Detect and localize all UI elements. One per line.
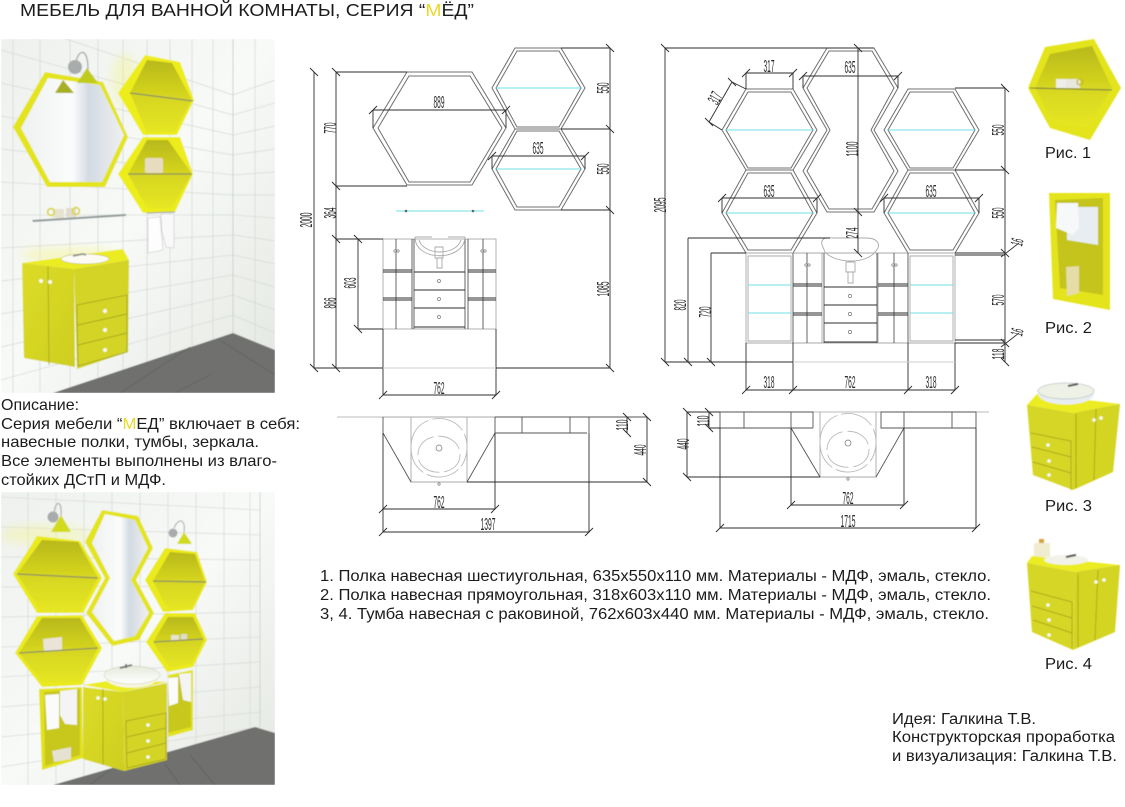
dimension labels: 1085 bbox=[593, 282, 613, 296]
caption: figure 4: Рис. 4 bbox=[1045, 656, 1092, 673]
figure 4: vanity with counter basin bbox=[1027, 539, 1120, 650]
lower cabinets bbox=[746, 238, 955, 362]
dimension labels: 118 bbox=[988, 348, 1008, 360]
dimension labels: 550 bbox=[593, 163, 613, 174]
dimension labels: 635 bbox=[844, 57, 856, 77]
dimension labels: 16 bbox=[1006, 326, 1028, 338]
drawing: plan view, right: 1715 bbox=[840, 511, 856, 531]
dimension labels: 762 bbox=[844, 372, 856, 392]
drawing: plan view, right: 440 bbox=[673, 438, 693, 450]
dimension labels: 635 bbox=[764, 181, 774, 201]
dimension labels: 866 bbox=[320, 298, 340, 308]
credits: Конструкторская проработка bbox=[892, 729, 1115, 746]
dimension labels: 720 bbox=[695, 306, 715, 318]
drawing: plan view, left: 110 bbox=[612, 419, 632, 430]
drawing: plan view, left: 762 bbox=[434, 492, 444, 512]
dimension labels bbox=[296, 82, 613, 398]
dimension labels: 364 bbox=[320, 207, 340, 218]
description text: Все элементы выполнены из влаго- bbox=[1, 453, 277, 470]
dimension labels: 635 bbox=[532, 138, 544, 158]
dimension labels: 820 bbox=[670, 299, 690, 310]
dimension labels: 1100 bbox=[842, 141, 862, 156]
parts list: 1. Полка навесная шестиугольная, 635х550х110 мм. Материалы - МДФ, эмаль, стекло. bbox=[320, 568, 991, 585]
figure 1: hexagon shelf bbox=[1028, 39, 1121, 140]
dimension labels: 317 bbox=[764, 56, 774, 76]
description text: навесные полки, тумбы, зеркала. bbox=[1, 434, 259, 451]
left shelf hexagons bbox=[722, 89, 817, 253]
dimension labels: 762 bbox=[434, 378, 444, 398]
dimension labels bbox=[650, 56, 1028, 392]
vanity cabinet front bbox=[383, 237, 496, 329]
parts list: 2. Полка навесная прямоугольная, 318х603х110 мм. Материалы - МДФ, эмаль, стекло. bbox=[320, 587, 991, 604]
dimension labels: 635 bbox=[926, 181, 936, 201]
drawing: plan view, right: 762 bbox=[842, 488, 854, 508]
drawing: plan view, left: 1397 bbox=[480, 514, 496, 534]
dimension labels: 2000 bbox=[296, 212, 316, 228]
lower shelf hexagon bbox=[492, 129, 585, 210]
drawing: front elevation, full set bbox=[650, 44, 1028, 394]
caption: figure 2: Рис. 2 bbox=[1045, 320, 1092, 337]
dimension labels: 550 bbox=[988, 207, 1008, 218]
description text: Серия мебели “ МЕД” включает в себя: bbox=[1, 416, 300, 433]
figure 3: vanity with vessel basin bbox=[1027, 383, 1120, 490]
parts list: 3, 4. Тумба навесная с раковиной, 762х603х440 мм. Материалы - МДФ, эмаль, стекло. bbox=[320, 606, 989, 623]
dimension labels: 889 bbox=[434, 92, 444, 112]
drawing: front elevation, mirror set: 550 bbox=[593, 82, 613, 94]
credits: и визуализация: Галкина Т.В. bbox=[892, 748, 1117, 765]
title: МЕБЕЛЬ ДЛЯ ВАННОЙ КОМНАТЫ, СЕРИЯ “ МЁД” bbox=[20, 0, 474, 20]
dimension labels: 317 bbox=[704, 88, 726, 108]
dimension labels: 318 bbox=[764, 372, 774, 392]
dimension labels: 603 bbox=[340, 278, 360, 288]
description text: Описание: bbox=[1, 397, 79, 414]
center tall mirror bbox=[803, 48, 898, 212]
upper shelf hexagon bbox=[492, 48, 585, 129]
dimension labels: 770 bbox=[320, 122, 340, 134]
dimension labels: 16 bbox=[1006, 236, 1028, 248]
parts list bbox=[320, 568, 991, 623]
drawing: plan view, right: 110 bbox=[693, 415, 713, 426]
credits bbox=[892, 711, 1117, 765]
description text: стойких ДСтП и МДФ. bbox=[1, 472, 166, 489]
glass shelf bbox=[396, 210, 484, 212]
right shelf hexagons bbox=[884, 89, 979, 253]
drawing: plan view, left: 440 bbox=[630, 444, 650, 456]
dimension labels: 318 bbox=[926, 372, 936, 392]
dimension labels: 550 bbox=[988, 124, 1008, 136]
dimension labels: 274 bbox=[842, 227, 862, 238]
description text bbox=[1, 397, 300, 489]
caption: figure 1: Рис. 1 bbox=[1045, 145, 1091, 162]
drawing: plan view, right bbox=[673, 408, 989, 532]
mirror hexagon bbox=[373, 72, 506, 185]
dimension labels: 570 bbox=[988, 294, 1008, 306]
photo: bathroom set with mirror bbox=[1, 39, 275, 393]
figure 2: rectangular shelf bbox=[1049, 193, 1110, 310]
caption: figure 3: Рис. 3 bbox=[1045, 498, 1092, 515]
drawing: plan view, left bbox=[337, 413, 651, 536]
dimension labels: 2095 bbox=[650, 198, 670, 212]
dimension lines bbox=[661, 44, 1019, 394]
dimension lines bbox=[310, 44, 614, 399]
drawing: front elevation, mirror set bbox=[296, 44, 614, 399]
credits: Идея: Галкина Т.В. bbox=[892, 711, 1036, 728]
photo: full bathroom set bbox=[0, 492, 275, 785]
